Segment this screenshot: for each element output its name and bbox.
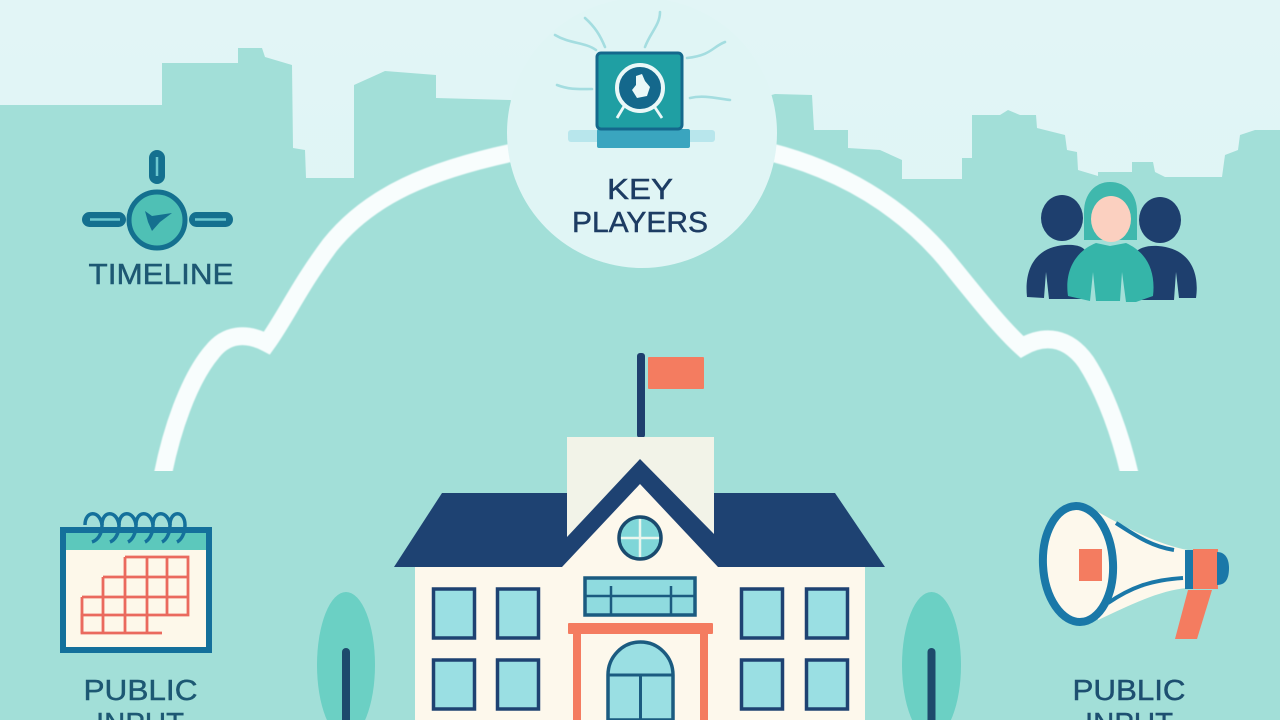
- label: public input right: [1072, 675, 1186, 720]
- icon: group of people: [1027, 182, 1197, 302]
- tower: [567, 437, 714, 545]
- label: key players: PLAYERS: [572, 207, 708, 239]
- tree right: [902, 592, 961, 720]
- icon: calendar: [63, 514, 209, 650]
- calendar date grid: [82, 557, 188, 633]
- icon: megaphone: [1040, 504, 1229, 639]
- entrance portico: [568, 623, 713, 720]
- label: public input left: [84, 675, 198, 720]
- label: key players: [572, 174, 708, 239]
- roof: [394, 493, 885, 567]
- round window: [619, 517, 661, 559]
- main building body: [415, 565, 865, 720]
- tree left: [317, 592, 375, 720]
- arc left side: [160, 152, 515, 490]
- arc right side: [770, 152, 1133, 490]
- icon: key players device: [555, 12, 730, 148]
- front door: [608, 642, 673, 720]
- label: public input right: PUBLIC: [1072, 675, 1186, 707]
- transom window: [585, 578, 695, 615]
- label: public input left: PUBLIC: [84, 675, 198, 707]
- icon: timeline clock: [82, 150, 233, 248]
- flag: [637, 353, 704, 438]
- key players circle: [507, 0, 777, 268]
- school building: [394, 353, 885, 720]
- center person: [1067, 182, 1154, 302]
- gable: [562, 459, 718, 570]
- right person: [1132, 197, 1197, 300]
- left person: [1027, 195, 1088, 299]
- white connector arc: [160, 152, 1133, 490]
- building windows: [434, 589, 848, 709]
- label: timeline: TIMELINE: [88, 259, 234, 291]
- label: key players: KEY: [607, 174, 673, 206]
